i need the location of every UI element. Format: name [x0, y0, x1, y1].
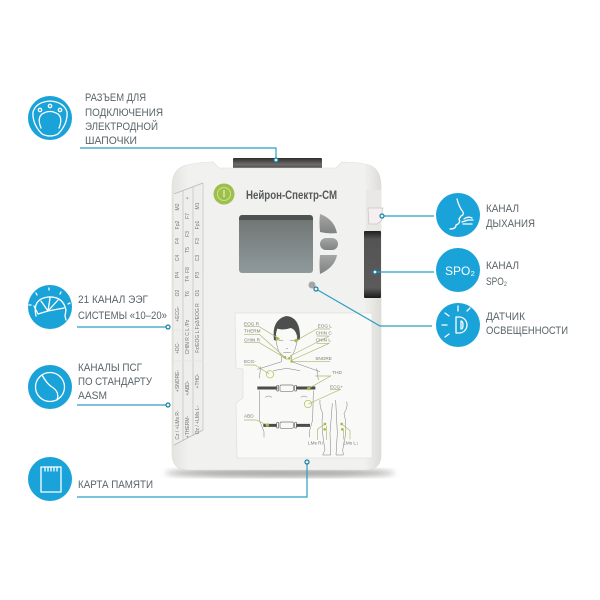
side labels: column 1: +DC-: [175, 342, 181, 354]
label: electrode cap connector: ЭЛЕКТРОДНОЙ: [85, 120, 158, 133]
figure labels: ECG+: [330, 385, 343, 390]
side labels: column 2: +: [185, 196, 191, 199]
figure labels: CHIN R: [244, 337, 261, 342]
device body: [172, 162, 381, 470]
label: electrode cap connector: ПОДКЛЮЧЕНИЯ: [85, 107, 163, 119]
side labels: column 2: T4: [185, 276, 191, 282]
device name: Нейрон-Спектр-СМ: [246, 188, 337, 202]
side labels: column 3: C3: [195, 255, 201, 261]
side labels: column 2: [185, 196, 191, 438]
label: memory card: КАРТА ПАМЯТИ: [78, 479, 153, 491]
icon: light sensor: [436, 303, 480, 347]
label: light sensor: ДАТЧИК: [486, 311, 526, 323]
label: 21 EEG channels: СИСТЕМЫ «10–20»: [78, 310, 167, 322]
figure labels: THD: [332, 370, 343, 375]
side labels: column 1: Cz / +LMs R-: [175, 410, 181, 440]
torso: [259, 391, 313, 437]
icon: electrode cap: [28, 96, 72, 140]
electrode placement panel: [235, 313, 372, 458]
side labels: column 3: O1: [195, 289, 201, 296]
label: respiration channel: ДЫХАНИЯ: [486, 218, 535, 230]
figure labels: SNORE: [315, 356, 332, 361]
side labels: column 2: +ABD-: [185, 380, 191, 395]
figure labels: [244, 321, 358, 446]
breathing port: [366, 190, 383, 230]
label: electrode cap connector: РАЗЪЕМ ДЛЯ: [85, 92, 146, 104]
side labels: column 2: T6: [185, 291, 191, 297]
side labels: column 1: [175, 203, 181, 440]
label: respiration channel: КАНАЛ: [486, 203, 519, 215]
side labels: column 2: +THERM-: [185, 415, 191, 438]
control buttons: [320, 214, 338, 274]
connector lines: [77, 148, 434, 497]
label: SpO2 channel: SPO₂: [486, 276, 507, 288]
side labels: column 3: +THD-: [195, 373, 201, 388]
side labels: column 2: CHIN R C L /Pz: [185, 319, 191, 354]
label: PSG channels: КАНАЛЫ ПСГ: [78, 362, 142, 374]
label: PSG channels: [78, 362, 153, 402]
figure labels: THERM: [244, 329, 261, 334]
side labels: column 3: Fp1: [195, 220, 201, 229]
side labels: column 2: T5: [185, 247, 191, 253]
figure labels: EOG R: [244, 321, 260, 326]
side labels: column 3: Fz/EOG L Fp2/EOG R: [195, 303, 201, 353]
label: PSG channels: AASM: [78, 390, 107, 402]
figure labels: ABD: [244, 414, 254, 419]
icon: respiration: [436, 193, 480, 237]
side labels: column 1: +SNORE-: [175, 369, 181, 392]
side label strips: [174, 182, 203, 445]
side labels: column 2: F3: [185, 231, 191, 237]
icon: memory card: [28, 457, 72, 501]
side labels: column 1: M2: [175, 203, 181, 210]
side labels: column 3: [195, 202, 201, 434]
green electrodes: [266, 337, 344, 431]
side labels: column 2: F7: [185, 213, 191, 219]
light sensor: [308, 282, 316, 288]
label: light sensor: [486, 311, 568, 337]
label: 21 EEG channels: 21 КАНАЛ ЭЭГ: [78, 294, 148, 306]
side labels: column 2: F8: [185, 267, 191, 273]
side labels: column 1: P4: [175, 272, 181, 278]
chest belt: [257, 385, 315, 391]
side labels: column 1: Fp2: [175, 220, 181, 229]
label: SpO2 channel: КАНАЛ: [486, 260, 519, 272]
label: electrode cap connector: [85, 92, 163, 147]
label: PSG channels: ПО СТАНДАРТУ: [78, 376, 153, 388]
side labels: column 3: Oz / +LMs L-: [195, 405, 201, 434]
figure labels: EOG L: [318, 324, 332, 329]
figure labels: CHIN C: [316, 331, 332, 336]
right SpO2 connector: [364, 231, 381, 298]
icon: SpO2: [436, 248, 480, 292]
abdomen belt: [263, 422, 310, 428]
label: electrode cap connector: ШАПОЧКИ: [85, 135, 137, 147]
top electrode cap connector: [233, 158, 322, 171]
side labels: column 3: M1: [195, 202, 201, 209]
side labels: column 3: P3: [195, 272, 201, 278]
side labels: column 3: F3: [195, 238, 201, 244]
label: light sensor: ОСВЕЩЕННОСТИ: [486, 325, 568, 337]
label: respiration channel: [486, 203, 535, 230]
display screen: [239, 215, 313, 273]
device shadow: [165, 468, 395, 478]
figure labels: ECG-: [244, 359, 256, 364]
label: SpO2 channel: [486, 260, 519, 288]
side labels: column 1: O2: [175, 289, 181, 296]
figure labels: CHIN L: [316, 338, 331, 343]
icon: PSG channels: [28, 365, 72, 409]
side labels: column 1: C4: [175, 255, 181, 261]
figure labels: LMs R↕: [308, 441, 324, 446]
head figure: [257, 316, 320, 380]
green leader lines: [244, 327, 350, 440]
figure labels: LMs L↕: [343, 441, 358, 446]
icon: SpO2: SPO₂: [445, 264, 475, 278]
icon: 21 channel EEG: [28, 285, 72, 329]
legs: [320, 400, 347, 455]
side labels: column 1: F4: [175, 238, 181, 244]
power button: [214, 184, 234, 204]
side labels: column 1: +ECG-: [175, 306, 181, 322]
label: 21 EEG channels: [78, 294, 167, 322]
